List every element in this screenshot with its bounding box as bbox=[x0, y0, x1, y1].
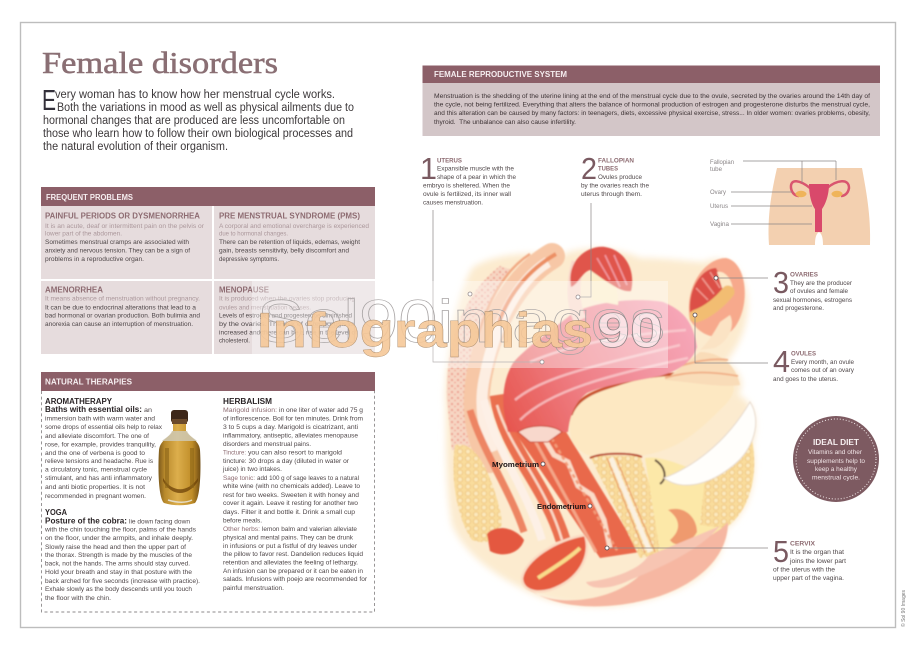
leader lines and pins bbox=[433, 203, 768, 548]
callout: ideal diet: supplements help to bbox=[807, 458, 866, 465]
diagram labels bbox=[710, 159, 734, 228]
herbalism text: white wine (with no chemicals added). Leave to bbox=[222, 483, 360, 490]
leader: uterus bbox=[433, 210, 542, 362]
left fat pad bbox=[454, 444, 502, 542]
intro text: very woman has to know how her menstrual cycle works. bbox=[55, 89, 335, 101]
yoga text: on the floor, under the armpits, and inhale deeply. bbox=[45, 535, 193, 542]
herbalism text: cover it again. Leave it resting for another two bbox=[223, 500, 358, 507]
body location diagram bbox=[710, 159, 870, 245]
herbalism text: Marigold infusion: bbox=[223, 407, 277, 414]
card: menopause: Levels of estrogen and progesterone diminished bbox=[219, 312, 352, 320]
intro text: those who learn how to follow their own biological processes and bbox=[43, 128, 353, 140]
diagram labels: tube bbox=[710, 166, 722, 173]
callout 4: ovules: OVULES bbox=[791, 350, 817, 358]
card: premenstrual syndrome: PRE MENSTRUAL SYNDROME (PMS) bbox=[219, 210, 360, 220]
credit: © Sol 90 Images bbox=[900, 590, 907, 627]
uterus bbox=[503, 300, 697, 432]
callout 1: uterus: UTERUS bbox=[437, 158, 463, 164]
aromatherapy text: some drops of essential oils help to relax bbox=[45, 424, 163, 431]
callout 5: cervix: It is the organ that bbox=[790, 549, 844, 556]
callout 4: ovules bbox=[773, 344, 855, 383]
label: endometrium: Endometrium bbox=[537, 502, 586, 511]
card: menopause: increased and there can be a rise in the level of bbox=[219, 330, 357, 336]
diagram labels: Vagina bbox=[710, 221, 729, 228]
diagram labels: Fallopian bbox=[710, 159, 734, 166]
rectum tube bbox=[477, 256, 552, 460]
aromatherapy text: immersion bath with warm water and bbox=[45, 416, 155, 422]
watermark: 90 bbox=[597, 304, 663, 358]
card: painful periods: problems in a reproductive organ. bbox=[45, 256, 144, 263]
ovaries bbox=[796, 191, 842, 197]
rectal canal bbox=[522, 535, 587, 592]
panel: frequent problems bbox=[41, 187, 375, 354]
card: premenstrual syndrome: due to hormonal changes. bbox=[219, 230, 288, 238]
menstruation text block: Menstruation is the shedding of the uterine lining at the end of the menstrual cycle due to the ovule, secreted by the ovaries around the 14th day of bbox=[434, 93, 870, 100]
card: menopause: by the ovaries. The risk of osteoporosis is bbox=[219, 321, 354, 328]
herbalism text: Sage tonic: bbox=[223, 475, 255, 482]
card: premenstrual syndrome: There can be retention of liquids, edemas, weight bbox=[219, 239, 360, 246]
card: painful periods: anxiety and nervous tension. They can be a sign of bbox=[45, 248, 190, 254]
callout 5: cervix: upper part of the vagina. bbox=[773, 575, 844, 582]
aromatherapy text: relieve tensions and headache. Rue is bbox=[45, 458, 153, 465]
callout 3: ovaries: They are the producer bbox=[790, 280, 853, 287]
intro text: E bbox=[42, 85, 56, 117]
callout 5: cervix: of the uterus with the bbox=[773, 566, 835, 574]
yoga text: Slowly raise the head and then the upper part of bbox=[45, 544, 186, 551]
callout 2: fallopian tubes: FALLOPIAN bbox=[598, 158, 634, 164]
callout 5: cervix: CERVIX bbox=[790, 540, 816, 548]
leader: cervix bbox=[607, 547, 768, 549]
herbalism text: in one liter of water add 75 g bbox=[279, 407, 363, 414]
herbalism text: painful menstruation. bbox=[223, 585, 284, 592]
yoga text: Exhale slowly as the body descends until you touch bbox=[45, 586, 192, 593]
watermark: Sel90images bbox=[257, 288, 665, 355]
callout 3: ovaries: OVARIES bbox=[790, 272, 819, 278]
callout 1: uterus: shape of a pear in which the bbox=[437, 174, 516, 181]
body silhouette bbox=[769, 168, 870, 245]
card: premenstrual syndrome: gain, breasts sensitivity, belly discomfort and bbox=[219, 248, 349, 254]
herbalism text: of inflorescence. Boil for ten minutes. Drink from bbox=[223, 416, 363, 422]
herbalism text: in infusions or put a fistful of dry leaves under bbox=[223, 543, 358, 550]
posterior wall stripes bbox=[470, 410, 524, 532]
callout 4: ovules: 4 bbox=[773, 344, 790, 379]
card: amenorrhea: AMENORRHEA bbox=[45, 284, 103, 294]
diagram labels: Uterus bbox=[710, 203, 728, 210]
aromatherapy text: and the one of verbena is good to bbox=[45, 450, 145, 457]
fat and soft tissue base bbox=[445, 249, 755, 607]
bladder bbox=[569, 372, 734, 456]
intro text: the natural evolution of their organism. bbox=[43, 141, 228, 153]
yoga text: back, not the hands. The arms should stay curved. bbox=[45, 560, 190, 568]
natural therapies heading: NATURAL THERAPIES bbox=[45, 378, 133, 386]
pubic pad bbox=[664, 402, 756, 485]
herbalism text: tincture: 30 drops a day (diluted in water or bbox=[223, 458, 350, 465]
callout: ideal diet: Vitamins and other bbox=[808, 449, 862, 456]
intro text bbox=[42, 85, 354, 153]
yoga text bbox=[44, 507, 200, 602]
herbalism text: juice) in two intakes. bbox=[222, 466, 282, 473]
card: painful periods: Sometimes menstrual cramps are associated with bbox=[45, 239, 189, 246]
callout 1: uterus: embryo is sheltered. When the bbox=[423, 182, 510, 190]
icon: essential oil bottle bbox=[159, 410, 200, 505]
callout: ideal diet bbox=[793, 416, 879, 502]
title: Female disorders bbox=[42, 45, 278, 80]
card: premenstrual syndrome: depressive symptoms. bbox=[219, 256, 279, 263]
yoga text: with the chin touching the floor, palms of the hands bbox=[44, 526, 196, 534]
callout 1: uterus: 1 bbox=[420, 151, 437, 186]
aromatherapy text: and anti biotic properties. It is not bbox=[45, 484, 145, 491]
uterus and fallopian tubes bbox=[791, 181, 849, 232]
herbalism text: disorders and menstrual pains. bbox=[223, 441, 311, 448]
frequent problems heading bbox=[41, 187, 375, 206]
herbalism text: HERBALISM bbox=[223, 396, 272, 406]
aromatherapy text: a circulatory tonic, menstrual cycle bbox=[45, 466, 147, 474]
callout 4: ovules: and goes to the uterus. bbox=[773, 376, 838, 383]
natural therapies heading bbox=[41, 372, 375, 391]
yoga text: the floor with the chin. bbox=[45, 595, 111, 602]
herbalism text: Other herbs: bbox=[223, 526, 260, 533]
callout 3: ovaries: and progesterone. bbox=[773, 305, 824, 312]
urethra bbox=[590, 456, 672, 558]
aromatherapy text: an bbox=[144, 407, 153, 414]
herbalism text: inflammatory, antiseptic, alleviates menopause bbox=[223, 432, 358, 440]
callout 2: fallopian tubes: by the ovaries reach the bbox=[581, 182, 649, 190]
card: amenorrhea: It means absence of menstruation without pregnancy. bbox=[45, 296, 200, 302]
callout 5: cervix: joins the lower part bbox=[789, 558, 846, 565]
anatomical illustration bbox=[445, 247, 756, 607]
callout 1: uterus: causes menstruation. bbox=[423, 200, 483, 206]
intro text: hormonal changes that are produced are less uncomfortable on bbox=[43, 115, 345, 127]
panel: female reproductive system bbox=[422, 66, 880, 136]
callout 2: fallopian tubes: TUBES bbox=[598, 166, 619, 172]
right tissue folds bbox=[665, 352, 740, 386]
herbalism text: add 100 g of sage leaves to a natural bbox=[257, 475, 359, 482]
fallopian tube bbox=[574, 262, 580, 320]
card: amenorrhea bbox=[41, 281, 212, 354]
herbalism text: salads. Infusions with poejo are recommended for bbox=[223, 576, 368, 583]
callout 4: ovules: comes out of an ovary bbox=[791, 367, 855, 374]
callout 5: cervix bbox=[773, 534, 846, 582]
reproductive system heading bbox=[422, 66, 880, 83]
vulva band bbox=[527, 522, 728, 606]
spine tissue bbox=[447, 266, 512, 450]
herbalism text: days. Filter it and bottle it. Drink a small cup bbox=[223, 509, 355, 516]
callout 5: cervix: 5 bbox=[773, 534, 789, 569]
watermark bbox=[252, 281, 668, 368]
callout 1: uterus: ovule is fertilized, its inner wall bbox=[423, 191, 511, 198]
callout: ideal diet: menstrual cycle. bbox=[812, 474, 860, 482]
panel: natural therapies bbox=[41, 372, 375, 612]
diagram labels: Ovary bbox=[710, 189, 727, 196]
herbalism text: physical and mental pains. They can be drunk bbox=[223, 534, 354, 542]
aromatherapy text: AROMATHERAPY bbox=[45, 396, 112, 406]
herbalism text: Tincture: bbox=[223, 450, 246, 456]
card: premenstrual syndrome bbox=[214, 206, 375, 279]
herbalism text: An infusion can be prepared or it can be eaten in bbox=[223, 568, 363, 575]
card: painful periods bbox=[41, 206, 212, 279]
callout 2: fallopian tubes: Ovules produce bbox=[598, 174, 642, 181]
ovary bbox=[689, 258, 745, 337]
card: painful periods: lower part of the abdomen. bbox=[45, 230, 122, 238]
herbalism text: rest for two weeks. Sweeten it with honey and bbox=[223, 492, 359, 499]
yoga text: lie down facing down bbox=[129, 518, 190, 526]
callout 1: uterus: Expansible muscle with the bbox=[437, 166, 514, 172]
diagram leader lines bbox=[731, 161, 836, 224]
callout: ideal diet: keep a healthy bbox=[815, 466, 858, 473]
menstruation text block: and this alteration can be caused by many factors: in teenagers, diets, excessive physical exercise, stress... In older women: ovaries problems, obesity, bbox=[434, 110, 870, 117]
marker pins bbox=[468, 276, 718, 550]
herbalism text: the pillow to favor rest. Dandelion reduces liquid bbox=[223, 551, 363, 558]
callout 3: ovaries: 3 bbox=[773, 265, 789, 300]
card: painful periods: PAINFUL PERIODS OR DYSMENORRHEA bbox=[45, 210, 200, 220]
herbalism text: 3 to 5 cups a day. Marigold is cicatrizant, anti bbox=[223, 424, 358, 431]
callout 3: ovaries: sexual hormones, estrogens bbox=[773, 297, 852, 304]
card: menopause bbox=[214, 281, 375, 354]
anal muscle bbox=[487, 528, 524, 554]
herbalism text bbox=[222, 396, 368, 592]
menstruation text block: thyroid. The unbalance can also cause infertility. bbox=[434, 119, 576, 126]
leader: fallopian tubes bbox=[578, 203, 591, 297]
callout 2: fallopian tubes bbox=[581, 151, 649, 198]
callout 2: fallopian tubes: 2 bbox=[581, 151, 597, 186]
callout 2: fallopian tubes: uterus through them. bbox=[581, 191, 642, 198]
card: amenorrhea: It can be due to endocrinal alterations that lead to a bbox=[45, 304, 196, 312]
label: myometrium: Myometrium bbox=[492, 460, 539, 469]
menstruation text block bbox=[422, 83, 880, 136]
card: premenstrual syndrome: A corporal and emotional overcharge is experienced bbox=[219, 223, 369, 230]
cervix tip bbox=[518, 426, 562, 442]
card: painful periods: It is an acute, deaf or intermittent pain on the pelvis or bbox=[45, 223, 205, 230]
yoga text: YOGA bbox=[45, 507, 67, 517]
card: amenorrhea: bad hormonal or ovarian production. Both bulimia and bbox=[45, 312, 200, 320]
intro text: Both the variations in mood as well as physical ailments due to bbox=[57, 102, 354, 114]
yoga text: Posture of the cobra: bbox=[45, 516, 127, 526]
card: amenorrhea: anorexia can cause an interruption of menstruation. bbox=[45, 321, 193, 328]
clitoral fat bbox=[645, 440, 754, 552]
card: menopause: cholesterol. bbox=[219, 338, 250, 344]
callout 3: ovaries bbox=[773, 265, 853, 312]
yoga text: back arched for five seconds (increase with practice). bbox=[45, 578, 200, 585]
reproductive system heading: FEMALE REPRODUCTIVE SYSTEM bbox=[434, 70, 567, 79]
aromatherapy text: recommended in pregnant women. bbox=[45, 493, 146, 500]
frequent problems heading: FREQUENT PROBLEMS bbox=[46, 193, 134, 202]
herbalism text: you can also resort to marigold bbox=[248, 450, 342, 456]
aromatherapy text: stimulant, and has anti inflammatory bbox=[45, 475, 153, 482]
card: menopause: MENOPAUSE bbox=[219, 284, 269, 294]
card: menopause: It is produced when the ovaries stop producing bbox=[219, 296, 355, 302]
yoga text: the thorax. Strength is made by the muscles of the bbox=[45, 552, 192, 559]
herbalism text: retention and alleviates the feeling of lethargy. bbox=[223, 560, 358, 566]
aromatherapy text: Baths with essential oils: bbox=[45, 404, 142, 414]
vaginal canal bbox=[510, 422, 640, 558]
herbalism text: before meals. bbox=[223, 518, 262, 524]
watermark: Infographias bbox=[257, 304, 593, 358]
callout: ideal diet: IDEAL DIET bbox=[813, 438, 859, 447]
menstruation text block: the cycle, not being fertilized. Everything that alters the balance of hormonal production of estrogen and progesterone disturbs the menstrual cycle, bbox=[434, 102, 870, 108]
dashed panel border bbox=[42, 391, 374, 612]
aromatherapy text: and alleviate discomfort. The one of bbox=[45, 433, 149, 440]
callout 3: ovaries: of ovules and female bbox=[790, 288, 848, 295]
herbalism text: lemon balm and valerian alleviate bbox=[262, 526, 357, 533]
aromatherapy text bbox=[45, 396, 163, 500]
aromatherapy text: rose, for example, provides tranquility, bbox=[45, 442, 156, 448]
callout 1: uterus bbox=[420, 151, 516, 206]
callout 4: ovules: Every month, an ovule bbox=[791, 359, 854, 366]
leader: ovaries bbox=[716, 277, 768, 279]
yoga text: Hold your breath and stay in that posture with the bbox=[45, 569, 192, 576]
leader: ovules bbox=[695, 315, 768, 363]
card: menopause: ovules and menstruation ceases. bbox=[219, 304, 311, 312]
